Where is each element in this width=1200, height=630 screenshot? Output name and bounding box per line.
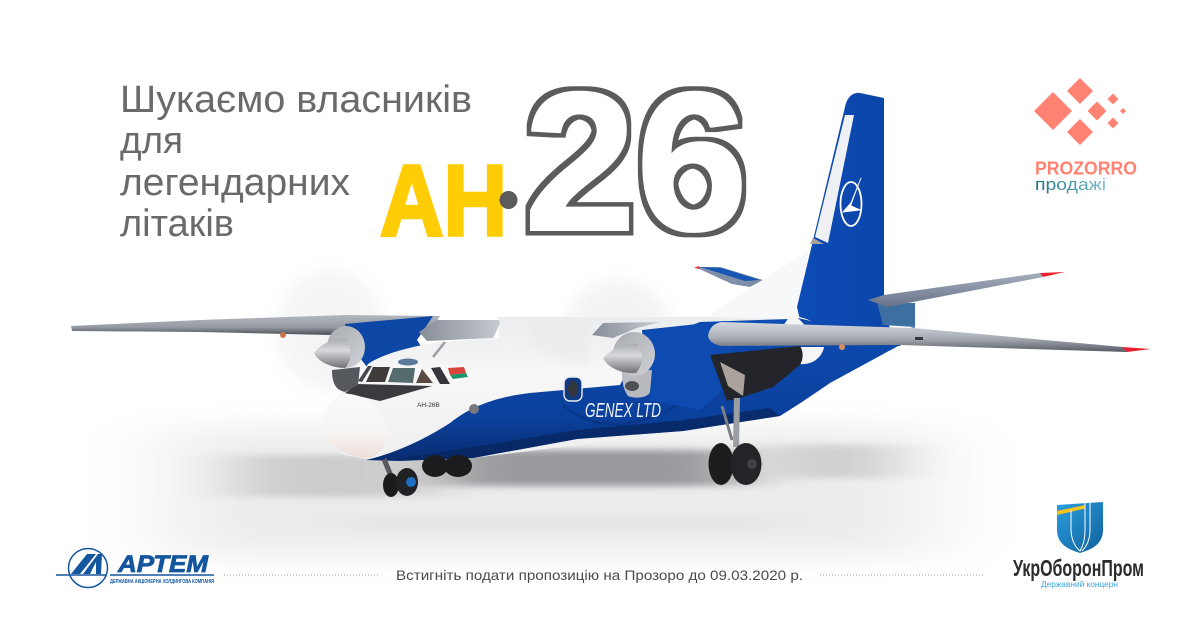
far engine (314, 326, 365, 392)
model name: АН-26: АН (380, 145, 507, 257)
heading: літаків (120, 203, 234, 245)
livery text: GENEX LTD (585, 400, 661, 422)
heading (120, 79, 472, 245)
near wing (708, 322, 1151, 352)
heading: для (120, 120, 183, 162)
propeller disc blur far (276, 270, 384, 390)
door (564, 377, 582, 401)
near stabilizer (868, 272, 1065, 307)
cockpit windshield (345, 358, 450, 401)
logo: Artem: АРТЕМ (117, 551, 209, 578)
model name: АН-26 (380, 51, 748, 272)
logo: Ukroboronprom: УкрОборонПром (1013, 555, 1144, 581)
near engine nacelle (642, 321, 735, 410)
white belly patch under wing (795, 347, 824, 364)
logo: Artem: ДЕРЖАВНА АКЦІОНЕРНА ХОЛДИНГОВА КОМПАНІЯ (110, 579, 214, 585)
dotted divider left (224, 574, 380, 576)
far wing (71, 315, 440, 335)
exhaust (720, 362, 745, 396)
heading: легендарних (120, 162, 350, 204)
far wing glove (419, 320, 502, 341)
ground shadow (170, 428, 930, 556)
round window (469, 404, 479, 414)
white fairing above wing (780, 316, 822, 332)
nose radome (323, 394, 387, 458)
registration label: AH-26B (417, 402, 440, 409)
antenna (433, 342, 445, 357)
far stabilizer (694, 266, 763, 287)
fuselage upper shading (530, 328, 590, 365)
far wing light (280, 332, 286, 338)
wheel bay (710, 346, 803, 401)
deadline note: Встигніть подати пропозицію на Прозоро до 09.03.2020 р. (396, 567, 803, 583)
tail fin (797, 93, 890, 330)
logo: Ukroboronprom: Державний концерн (1041, 580, 1118, 589)
main gear near (708, 398, 762, 485)
tail logo (840, 178, 862, 226)
dark belly stripe (390, 408, 780, 460)
propeller blur arc (563, 402, 683, 424)
propeller disc blur near (562, 280, 674, 400)
near engine (603, 332, 655, 398)
logo: Artem (56, 548, 214, 588)
nose gear (383, 459, 418, 497)
logo: Prozorro Продажі: продажі (1035, 175, 1106, 194)
heading: Шукаємо власників (120, 79, 472, 121)
logo: Prozorro Продажі: PROZORRO (1035, 158, 1137, 178)
logo: Ukroboronprom (1013, 502, 1144, 589)
rear blue body under fin (798, 318, 915, 346)
main gear far (422, 455, 472, 477)
logo: Prozorro Продажі (1034, 78, 1137, 194)
fuselage blue lower (366, 319, 900, 461)
dorsal fin (710, 250, 809, 325)
far engine nacelle (345, 316, 433, 367)
airplane An-26 (71, 93, 1151, 497)
rear fuselage stabilizer root (877, 303, 915, 327)
near wing glove (592, 322, 660, 338)
dotted divider right (820, 574, 985, 576)
model name: АН-26: 26 (524, 51, 748, 272)
fuselage white upper (323, 317, 830, 460)
flag (448, 367, 468, 379)
